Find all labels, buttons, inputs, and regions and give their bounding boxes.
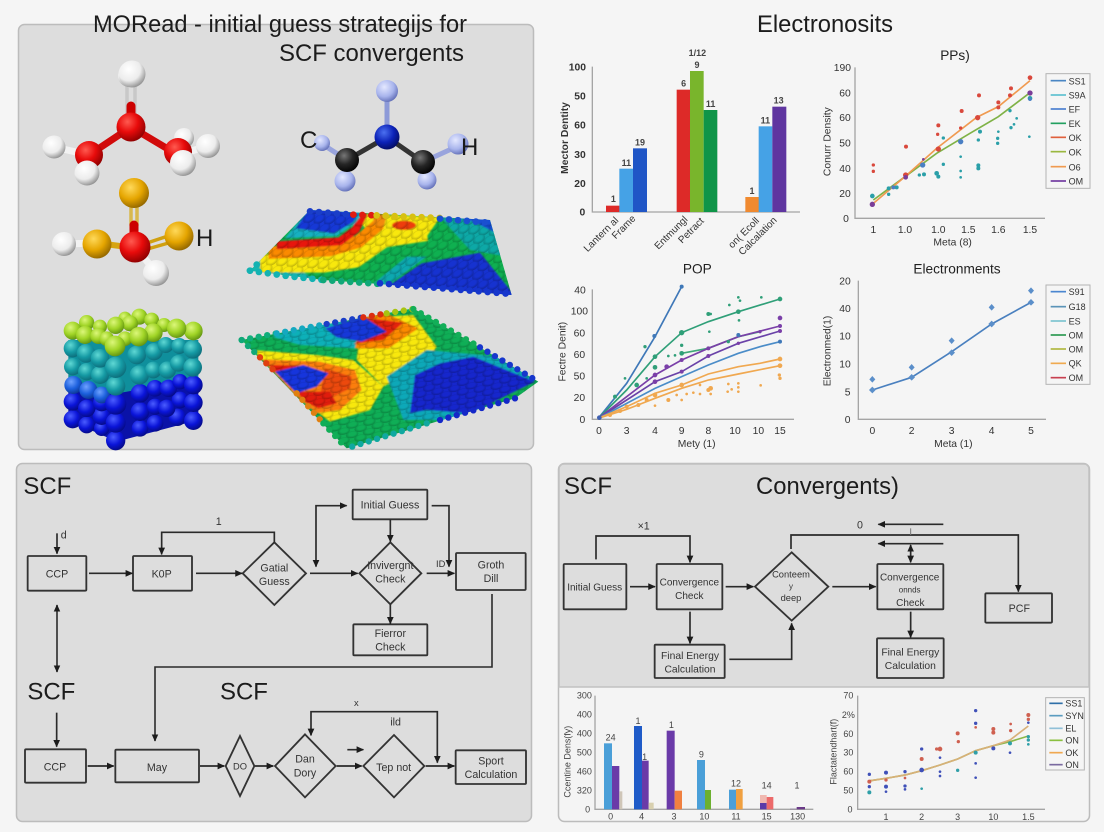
flowchart: right: Initial Guess bbox=[567, 583, 622, 594]
chart: POP multi-line: 100 bbox=[571, 307, 588, 318]
flowchart: right: Final Energy bbox=[661, 651, 720, 662]
flowchart: lower left: x bbox=[354, 698, 359, 708]
chart: bottom bar chart: 1 bbox=[642, 752, 647, 762]
beaded edges bbox=[250, 211, 512, 294]
cube interior bbox=[68, 378, 198, 442]
chart: bottom bar chart: 0 bbox=[585, 804, 590, 814]
chart: bar chart top: 60 bbox=[574, 120, 586, 131]
chart: POP multi-line: 8 bbox=[705, 426, 711, 437]
chart: bottom bar chart: 15 bbox=[762, 811, 772, 821]
chart: bar chart top: 1 bbox=[611, 194, 616, 204]
chart: bar chart top: 9 bbox=[694, 60, 699, 70]
chart: bar chart top: 0 bbox=[579, 208, 585, 219]
chart: bottom bar chart: 1 bbox=[635, 716, 640, 726]
chart: bar chart top: Frame bbox=[610, 213, 639, 242]
title: Electronosits: Electronosits bbox=[757, 11, 893, 38]
chart: Electronments line: 20 bbox=[839, 276, 851, 287]
flowchart: right: Calculation bbox=[885, 661, 936, 672]
chart: bottom bar chart: 11 bbox=[731, 811, 741, 821]
legend: OM bbox=[1069, 177, 1083, 187]
chart: bottom bar chart: 460 bbox=[577, 766, 592, 776]
molecule: red and white bbox=[42, 60, 220, 186]
surface: upper density map bbox=[246, 208, 512, 297]
chart: bar chart top: 13 bbox=[774, 96, 784, 106]
chart: POP multi-line: 50 bbox=[574, 371, 585, 382]
chart: bar chart top: 11 bbox=[761, 115, 770, 125]
chart: bottom scatter line: 2% bbox=[842, 710, 855, 720]
chart: POP multi-line bbox=[557, 261, 794, 450]
chart: bottom scatter line bbox=[829, 691, 1084, 822]
chart: PPs scatter line: Conurr Density bbox=[823, 106, 834, 176]
chart: bottom scatter line: 1.5 bbox=[1022, 812, 1035, 822]
legend: SS1 bbox=[1069, 76, 1086, 86]
chart: Electronments line: Electronments bbox=[913, 261, 1001, 276]
chart: bottom bar chart: 10 bbox=[699, 811, 709, 821]
molecule: gold and red bbox=[52, 178, 213, 286]
legend: EF bbox=[1069, 105, 1081, 115]
chart: Electronments line: 0 bbox=[869, 426, 875, 437]
chart: Electronments line: 40 bbox=[839, 304, 851, 315]
chart: bottom bar chart: 300 bbox=[577, 691, 592, 701]
chart: bottom bar chart: 3 bbox=[671, 811, 676, 821]
flowchart: lower left: Dan bbox=[295, 754, 315, 766]
chart: bar chart top: 11 bbox=[622, 158, 631, 168]
title: MORead: MORead - initial guess strategijs for bbox=[93, 11, 467, 38]
chart: bar chart top: 11 bbox=[706, 99, 715, 109]
connectors between flowcharts bbox=[57, 594, 492, 741]
molecule: blue and black bbox=[300, 80, 478, 192]
flowchart: upper left: d bbox=[61, 529, 67, 541]
chart: bar chart top: 100 bbox=[569, 63, 586, 74]
chart: PPs scatter line: 1.0 bbox=[898, 225, 912, 236]
legend bbox=[1046, 285, 1090, 384]
panel: SCF convergents right bbox=[558, 464, 1090, 822]
chart: bar chart top: Petract bbox=[676, 216, 707, 246]
chart: Electronments line: Meta (1) bbox=[934, 439, 973, 450]
chart: bottom bar chart bbox=[563, 691, 813, 821]
chart: bottom bar chart: 400 bbox=[577, 728, 592, 738]
chart: bar chart top: 6 bbox=[681, 79, 686, 89]
chart: bar chart top: 30 bbox=[574, 150, 586, 161]
chart: bottom scatter line: Flactatendhart(f) bbox=[829, 719, 839, 785]
chart: Electronments line: Electronmed(1) bbox=[823, 316, 834, 386]
chart: bar chart top: on( Ecoll bbox=[727, 216, 762, 251]
chart: PPs scatter line: 1 bbox=[870, 225, 876, 236]
chart: PPs scatter line: 0 bbox=[843, 214, 849, 225]
flowchart: upper left: Check bbox=[375, 573, 406, 585]
flowchart: upper left: Check bbox=[375, 641, 406, 653]
flowchart: right: Conteem bbox=[772, 570, 810, 580]
flowchart: upper left: Gatial bbox=[260, 563, 288, 575]
chart: PPs scatter line: 1.6 bbox=[991, 225, 1006, 236]
chart: Electronments line: 0 bbox=[845, 415, 851, 426]
legend: ON bbox=[1065, 760, 1079, 770]
atom label H: H bbox=[196, 225, 213, 252]
flowchart: lower left: Calculation bbox=[465, 769, 517, 781]
chart: PPs scatter line: PPs) bbox=[940, 48, 970, 63]
chart: Electronments line: 10 bbox=[839, 332, 851, 343]
chart: bottom scatter line: 60 bbox=[843, 767, 853, 777]
flowchart: upper left: Invivergnt bbox=[367, 560, 413, 572]
chart: Electronments line bbox=[823, 261, 1090, 450]
chart: PPs scatter line: 40 bbox=[839, 164, 851, 175]
flowchart: upper left: K0P bbox=[152, 569, 172, 581]
title: SCF convergents: SCF convergents bbox=[279, 40, 464, 67]
chart: bottom bar chart: 1 bbox=[669, 720, 674, 730]
flowchart: right: Convergence bbox=[880, 572, 940, 583]
flowchart: right: 0 bbox=[857, 520, 863, 532]
legend: OM bbox=[1069, 344, 1083, 354]
flowchart: right bbox=[564, 520, 1052, 678]
chart: bottom bar chart: 130 bbox=[790, 811, 805, 821]
legend: OK bbox=[1069, 133, 1082, 143]
chart: PPs scatter line: 20 bbox=[839, 189, 851, 200]
legend: SS1 bbox=[1065, 699, 1082, 709]
chart: POP multi-line: 0 bbox=[579, 415, 585, 426]
chart: POP multi-line: Fectre Denit) bbox=[557, 322, 568, 382]
flowchart: lower left bbox=[25, 679, 526, 797]
flowchart: right: deep bbox=[781, 593, 801, 603]
flowchart: upper left: CCP bbox=[46, 569, 68, 581]
flowchart: right: Calculation bbox=[664, 664, 716, 675]
heading: SCF right: SCF bbox=[564, 473, 612, 500]
chart: PPs scatter line: 1.0 bbox=[931, 225, 946, 236]
chart: bottom bar chart: 500 bbox=[577, 747, 592, 757]
flowchart: right: y bbox=[789, 582, 793, 591]
flowchart: lower left: Dory bbox=[294, 768, 317, 780]
chart: bottom bar chart: 320 bbox=[577, 785, 592, 795]
flowchart: right: Check bbox=[896, 598, 924, 609]
flowchart: lower left: May bbox=[147, 762, 168, 774]
chart: Electronments line: 5 bbox=[1028, 426, 1034, 437]
chart: PPs scatter line: 50 bbox=[839, 138, 851, 149]
flowchart: upper left: Groth bbox=[478, 560, 504, 572]
chart: bottom bar chart: 400 bbox=[577, 709, 592, 719]
chart: Electronments line: 4 bbox=[989, 426, 995, 437]
legend: OM bbox=[1069, 373, 1083, 383]
flowchart: upper left: 1 bbox=[216, 516, 222, 528]
flowchart: upper left bbox=[23, 473, 526, 655]
chart: POP multi-line: Mety (1) bbox=[678, 439, 716, 450]
flowchart: upper left: ID bbox=[436, 559, 446, 569]
chart: bar chart top: Lantern al bbox=[582, 215, 621, 254]
chart: PPs scatter line bbox=[823, 48, 1090, 248]
cube of coloured spheres bbox=[64, 309, 203, 450]
chart: Electronments line: 3 bbox=[949, 426, 955, 437]
legend: EL bbox=[1065, 724, 1076, 734]
chart: POP multi-line: 9 bbox=[679, 426, 685, 437]
chart: PPs scatter line: 190 bbox=[834, 63, 851, 74]
chart: POP multi-line: 0 bbox=[596, 426, 602, 437]
flowchart: lower left: ild bbox=[390, 716, 401, 728]
legend: ON bbox=[1065, 736, 1079, 746]
chart: bar chart top: Mector Dentity bbox=[560, 102, 571, 174]
panel: molecular structures bbox=[18, 24, 534, 450]
flowchart: right: PCF bbox=[1009, 603, 1030, 615]
chart: bar chart top: 1/12 bbox=[689, 48, 706, 58]
chart: Electronments line: 5 bbox=[845, 387, 851, 398]
flowchart: upper left: Fierror bbox=[375, 628, 406, 640]
flowchart: lower left: Sport bbox=[478, 756, 504, 768]
legend: O6 bbox=[1069, 162, 1081, 172]
chart: bar chart top: Entmungl bbox=[653, 214, 690, 252]
chart: bottom bar chart: 0 bbox=[608, 811, 613, 821]
chart: bottom bar chart: Ccentine Dens(fy) bbox=[563, 726, 573, 798]
chart: POP multi-line: 10 bbox=[729, 426, 741, 437]
atom label C: C bbox=[300, 127, 317, 154]
legend: OK bbox=[1069, 147, 1082, 157]
chart: POP multi-line: 40 bbox=[574, 286, 586, 297]
flowchart: lower left: SCF bbox=[220, 679, 268, 706]
flowchart: right: Final Energy bbox=[881, 648, 940, 659]
legend: QK bbox=[1069, 359, 1082, 369]
chart: bottom bar chart: 4 bbox=[639, 811, 644, 821]
chart: bottom bar chart: 9 bbox=[699, 749, 704, 759]
beaded edges bbox=[242, 309, 538, 448]
chart: Electronments line: 10 bbox=[839, 360, 851, 371]
chart: bar chart top: Calcalation bbox=[737, 215, 780, 258]
chart: bottom scatter line: 0 bbox=[847, 804, 852, 814]
chart: Electronments line: 2 bbox=[909, 426, 915, 437]
chart: bottom bar chart: 1 bbox=[794, 780, 799, 790]
legend: S9A bbox=[1069, 91, 1086, 101]
flowchart: lower left: Tep not bbox=[376, 762, 411, 774]
chart: bottom bar chart: 14 bbox=[762, 780, 772, 790]
chart: PPs scatter line: 60 bbox=[839, 88, 851, 99]
panel: SCF flowchart left bbox=[16, 464, 532, 822]
flowchart: right: ×1 bbox=[638, 521, 650, 533]
flowchart: right: onnds bbox=[899, 585, 921, 594]
chart: POP multi-line: 4 bbox=[652, 426, 658, 437]
chart: bottom bar chart: 24 bbox=[606, 732, 616, 742]
chart: bottom scatter line: 70 bbox=[843, 691, 853, 701]
chart: POP multi-line: 20 bbox=[574, 393, 585, 404]
chart: POP multi-line: 10 bbox=[753, 426, 764, 437]
heading: Convergents: Convergents) bbox=[756, 473, 899, 500]
flowchart: lower left: SCF bbox=[27, 679, 75, 706]
flowchart: upper left: Dill bbox=[484, 573, 498, 585]
flowchart: right: Convergence bbox=[660, 578, 719, 589]
chart: bar chart top: 19 bbox=[635, 137, 645, 147]
legend: SYN bbox=[1065, 711, 1084, 721]
chart: bar chart top: 20 bbox=[574, 179, 586, 190]
legend bbox=[1046, 74, 1090, 188]
chart: POP multi-line: POP bbox=[683, 261, 712, 276]
flowchart: upper left: Initial Guess bbox=[361, 499, 419, 511]
flowchart: upper left: SCF bbox=[23, 473, 71, 500]
legend: OK bbox=[1065, 748, 1078, 758]
chart: POP multi-line: 3 bbox=[624, 426, 630, 437]
legend: OM bbox=[1069, 330, 1083, 340]
legend: EK bbox=[1069, 119, 1081, 129]
flowchart: right: Check bbox=[675, 591, 703, 602]
chart: bottom scatter line: 1 bbox=[883, 812, 888, 822]
chart: bottom scatter line: 2 bbox=[919, 812, 924, 822]
flowchart: lower left: DO bbox=[233, 762, 247, 772]
atom label H: H bbox=[461, 134, 478, 161]
chart: bar chart top: 50 bbox=[574, 91, 586, 102]
legend: S91 bbox=[1069, 287, 1085, 297]
chart: POP multi-line: 60 bbox=[574, 350, 585, 361]
legend: G18 bbox=[1069, 302, 1086, 312]
chart: bar chart top bbox=[560, 48, 800, 258]
chart: bottom scatter line: 30 bbox=[843, 748, 853, 758]
chart: POP multi-line: 60 bbox=[574, 328, 585, 339]
flowchart: lower left: CCP bbox=[44, 761, 66, 773]
chart: PPs scatter line: 60 bbox=[839, 113, 851, 124]
chart: PPs scatter line: Meta (8) bbox=[933, 237, 972, 248]
chart: PPs scatter line: 1.5 bbox=[961, 225, 976, 236]
chart: bottom scatter line: 3 bbox=[955, 812, 960, 822]
legend: ES bbox=[1069, 316, 1081, 326]
flowchart: upper left: Guess bbox=[259, 576, 290, 588]
chart: bottom scatter line: 10 bbox=[988, 812, 998, 822]
legend bbox=[1046, 698, 1084, 770]
chart: bar chart top: 1 bbox=[749, 186, 754, 196]
chart: bottom scatter line: 60 bbox=[843, 729, 853, 739]
chart: bottom bar chart: 12 bbox=[731, 779, 741, 789]
chart: bottom scatter line: 50 bbox=[843, 786, 853, 796]
chart: POP multi-line: 15 bbox=[774, 426, 786, 437]
surface: lower density map bbox=[240, 300, 540, 450]
chart: PPs scatter line: 1.5 bbox=[1023, 225, 1037, 236]
